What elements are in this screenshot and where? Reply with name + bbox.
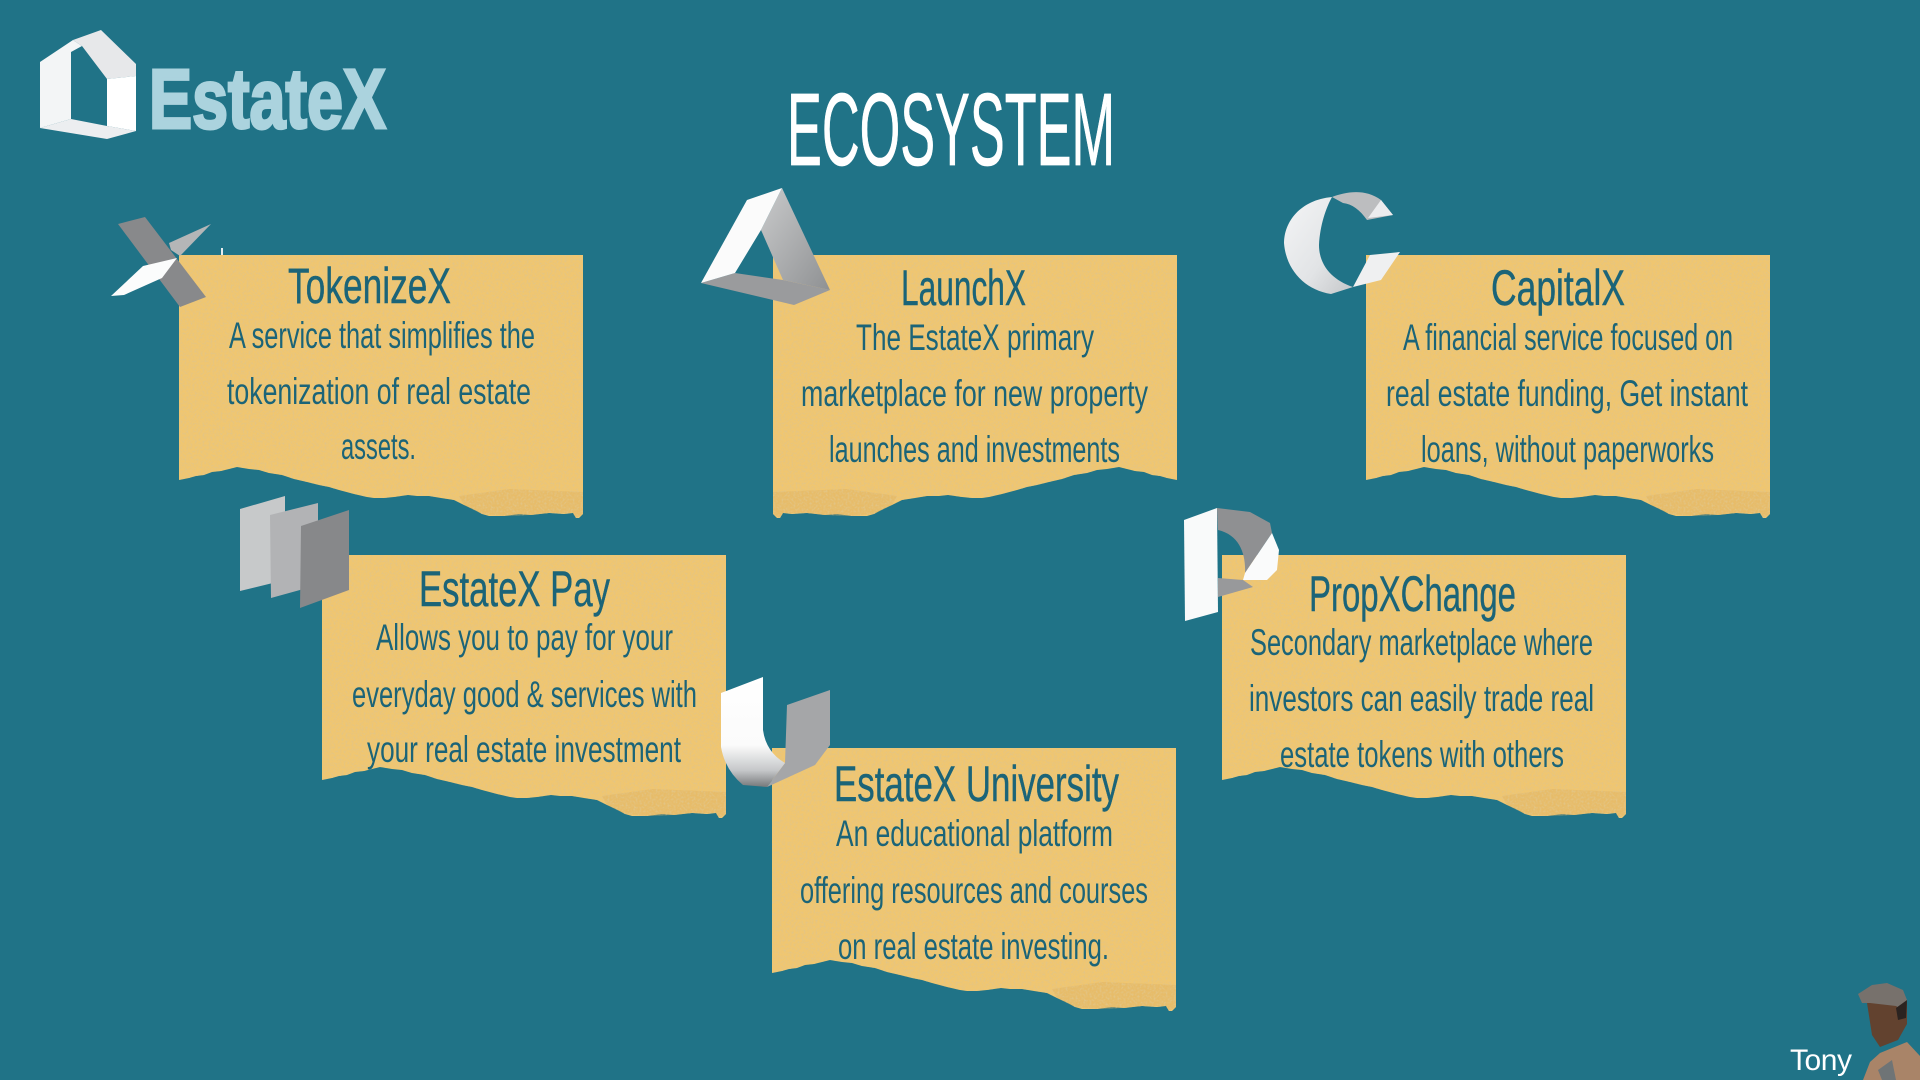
description: [801, 317, 1148, 470]
name label: Tony: [1790, 1044, 1852, 1077]
title: ECOSYSTEM: [787, 72, 1115, 187]
logo: EstateX: [40, 30, 386, 146]
heading: EstateX Pay: [419, 561, 610, 617]
description: A financial service focused on: [1403, 317, 1733, 358]
panel: EstateX University: [772, 748, 1176, 1011]
torn paper note: [772, 748, 1176, 1011]
heading: PropXChange: [1309, 566, 1516, 622]
panel: EstateX Pay: [322, 555, 726, 818]
panel: LaunchX: [773, 255, 1177, 518]
description: offering resources and courses: [800, 870, 1148, 911]
presenter: Tony: [1790, 983, 1920, 1080]
icon: folded triangle: [701, 188, 830, 305]
description: everyday good & services with: [352, 674, 697, 715]
panel: TokenizeX: [179, 255, 583, 518]
description: [1249, 622, 1594, 775]
icon: house: [40, 30, 136, 139]
description: loans, without paperworks: [1421, 429, 1714, 470]
torn paper note: [322, 555, 726, 818]
torn paper note: [179, 255, 583, 518]
torn paper note: [1366, 255, 1770, 518]
avatar: [1858, 983, 1920, 1080]
heading: CapitalX: [1491, 260, 1625, 316]
description: The EstateX primary: [856, 317, 1094, 358]
description: estate tokens with others: [1280, 734, 1564, 775]
description: [1386, 317, 1749, 470]
description: investors can easily trade real: [1249, 678, 1594, 719]
description: [800, 813, 1148, 967]
description: tokenization of real estate: [227, 371, 531, 412]
icon: folded panels: [240, 496, 349, 608]
torn paper note: [773, 255, 1177, 518]
description: An educational platform: [836, 813, 1113, 854]
panel: PropXChange: [1222, 555, 1626, 818]
icon: folded U: [721, 677, 830, 787]
heading: EstateX University: [834, 756, 1119, 812]
description: [227, 315, 535, 467]
icon: folded P: [1184, 508, 1279, 621]
description: launches and investments: [829, 429, 1120, 470]
description: marketplace for new property: [801, 373, 1148, 414]
panel: CapitalX: [1366, 255, 1770, 518]
description: A service that simplifies the: [229, 315, 535, 356]
description: real estate funding, Get instant: [1386, 373, 1749, 414]
logo wordmark: EstateX: [149, 52, 386, 146]
description: Secondary marketplace where: [1250, 622, 1593, 663]
description: assets.: [341, 426, 416, 467]
description: on real estate investing.: [838, 926, 1109, 967]
heading: LaunchX: [901, 260, 1026, 316]
torn paper note: [1222, 555, 1626, 818]
description: Allows you to pay for your: [376, 617, 673, 658]
icon: folded X: [111, 217, 223, 307]
icon: folded C: [1284, 192, 1400, 294]
heading: TokenizeX: [288, 258, 451, 314]
description: [352, 617, 697, 770]
description: your real estate investment: [367, 729, 682, 770]
